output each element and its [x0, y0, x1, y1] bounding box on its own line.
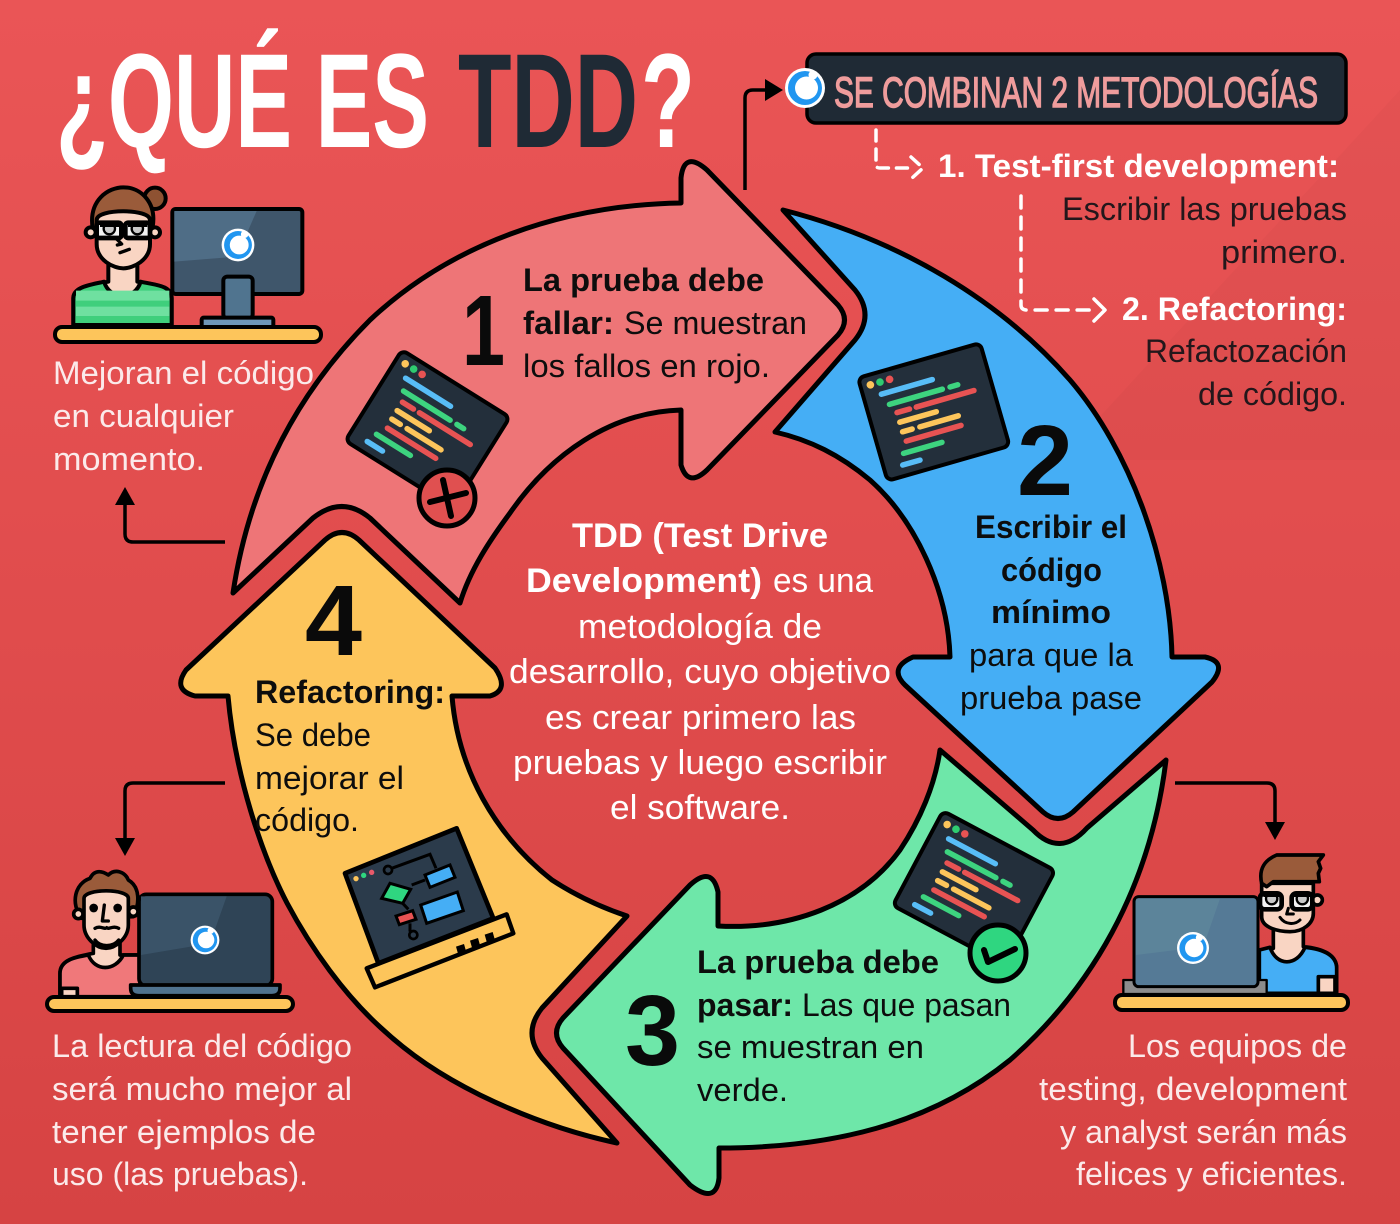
arrow: step 4 to person: [115, 783, 225, 856]
step 4 text: [255, 565, 445, 838]
step 3 text: La prueba debe: [697, 944, 939, 980]
step 3 text: pasar:: [697, 987, 793, 1023]
step 1 text: los fallos en rojo.: [523, 348, 770, 384]
arrow: step 4 yellow: [181, 532, 627, 1143]
step 4 text: código.: [255, 802, 359, 838]
methodology list: 1. Test-first development:: [938, 148, 1339, 184]
arrow: step 1 pink: [233, 162, 844, 603]
center description: TDD (Test Drive: [572, 517, 828, 555]
step 2 text: para que la: [969, 637, 1133, 673]
step 3 text: [625, 944, 1011, 1108]
methodology list: de código.: [1198, 376, 1347, 412]
icon: man with laptop, left: [60, 871, 280, 997]
methodology list: 2. Refactoring:: [1122, 291, 1347, 327]
icon: logo badge: [785, 68, 825, 108]
text: equipos: felices y eficientes.: [1076, 1156, 1347, 1192]
text: lectura: [52, 1028, 352, 1192]
step 2 text: Escribir el: [975, 509, 1127, 545]
step 2 text: mínimo: [991, 594, 1111, 630]
icon: logo on right laptop: [1177, 932, 1209, 964]
icon: code window blue: [858, 343, 1010, 481]
text: mejoran: Mejoran el código: [53, 355, 314, 391]
arrow: step 1 to header: [745, 79, 783, 190]
arrow: step 2 blue: [775, 210, 1219, 818]
center description: el software.: [610, 789, 790, 827]
methodology list: Escribir las pruebas: [1062, 191, 1347, 227]
icon: passing code window: [893, 811, 1055, 981]
icon: man with laptop, right: [1123, 855, 1337, 994]
title: TDD: [458, 27, 638, 176]
methodology list: [938, 148, 1347, 412]
step 2 text: 2: [1017, 405, 1073, 517]
icon: woman at monitor: [73, 187, 302, 327]
text: lectura: La lectura del código: [52, 1028, 352, 1064]
text: lectura: será mucho mejor al: [52, 1071, 352, 1107]
icon: logo on left laptop: [191, 926, 219, 954]
desk: right man: [1115, 995, 1348, 1010]
text: equipos: testing, development: [1039, 1071, 1347, 1107]
text: lectura: tener ejemplos de: [52, 1114, 316, 1150]
step 3 text: verde.: [697, 1072, 788, 1108]
step 1 text: [462, 262, 807, 387]
methodology list: primero.: [1221, 234, 1347, 270]
text: mejoran: [53, 355, 314, 477]
arrow: step 3 to person: [1175, 783, 1285, 840]
step 4 text: Se debe: [255, 717, 371, 753]
center description: es una: [773, 562, 873, 600]
center description: pruebas y luego escribir: [513, 744, 887, 782]
text: equipos: Los equipos de: [1128, 1028, 1347, 1064]
step 2 text: prueba pase: [960, 680, 1142, 716]
dashed arrow: to test-first: [876, 130, 923, 179]
icon: failing code window: [345, 350, 510, 526]
dashed arrow: to refactoring: [1021, 196, 1105, 321]
center description: desarrollo, cuyo objetivo: [509, 653, 891, 691]
desk: left man: [47, 997, 293, 1011]
text: mejoran: momento.: [53, 441, 205, 477]
step 2 text: [960, 405, 1142, 716]
center description: [509, 517, 891, 827]
step 1 text: 1: [462, 275, 505, 387]
step 3 text: se muestran en: [697, 1029, 924, 1065]
step 4 text: Refactoring:: [255, 674, 445, 710]
icon: refactoring laptop: [345, 828, 513, 987]
text: mejoran: en cualquier: [53, 398, 234, 434]
step 4 text: 4: [305, 565, 362, 677]
step 3 text: 3: [625, 975, 680, 1087]
methodology list: Refactozación: [1145, 333, 1347, 369]
step 1 text: fallar:: [523, 305, 614, 341]
header bar: se combinan 2 metodologías: [807, 54, 1346, 123]
center description: es crear primero las: [545, 699, 856, 737]
arrow: step 1 to text: [115, 487, 225, 542]
step 1 text: La prueba debe: [523, 262, 764, 298]
text: lectura: uso (las pruebas).: [52, 1156, 308, 1192]
title: ¿QUÉ ES: [56, 27, 429, 176]
step 4 text: mejorar el: [255, 760, 404, 796]
text: equipos: y analyst serán más: [1060, 1114, 1347, 1150]
center description: Development): [526, 562, 762, 600]
arrow: step 3 green: [556, 750, 1166, 1194]
icon: logo on monitor: [222, 229, 254, 261]
title: ?: [641, 27, 695, 176]
step 1 text: Se muestran: [624, 305, 807, 341]
step 3 text: Las que pasan: [802, 987, 1011, 1023]
text: equipos: [1039, 1028, 1347, 1192]
center description: metodología de: [578, 608, 822, 646]
step 2 text: código: [1001, 552, 1102, 588]
desk: woman: [55, 327, 321, 342]
